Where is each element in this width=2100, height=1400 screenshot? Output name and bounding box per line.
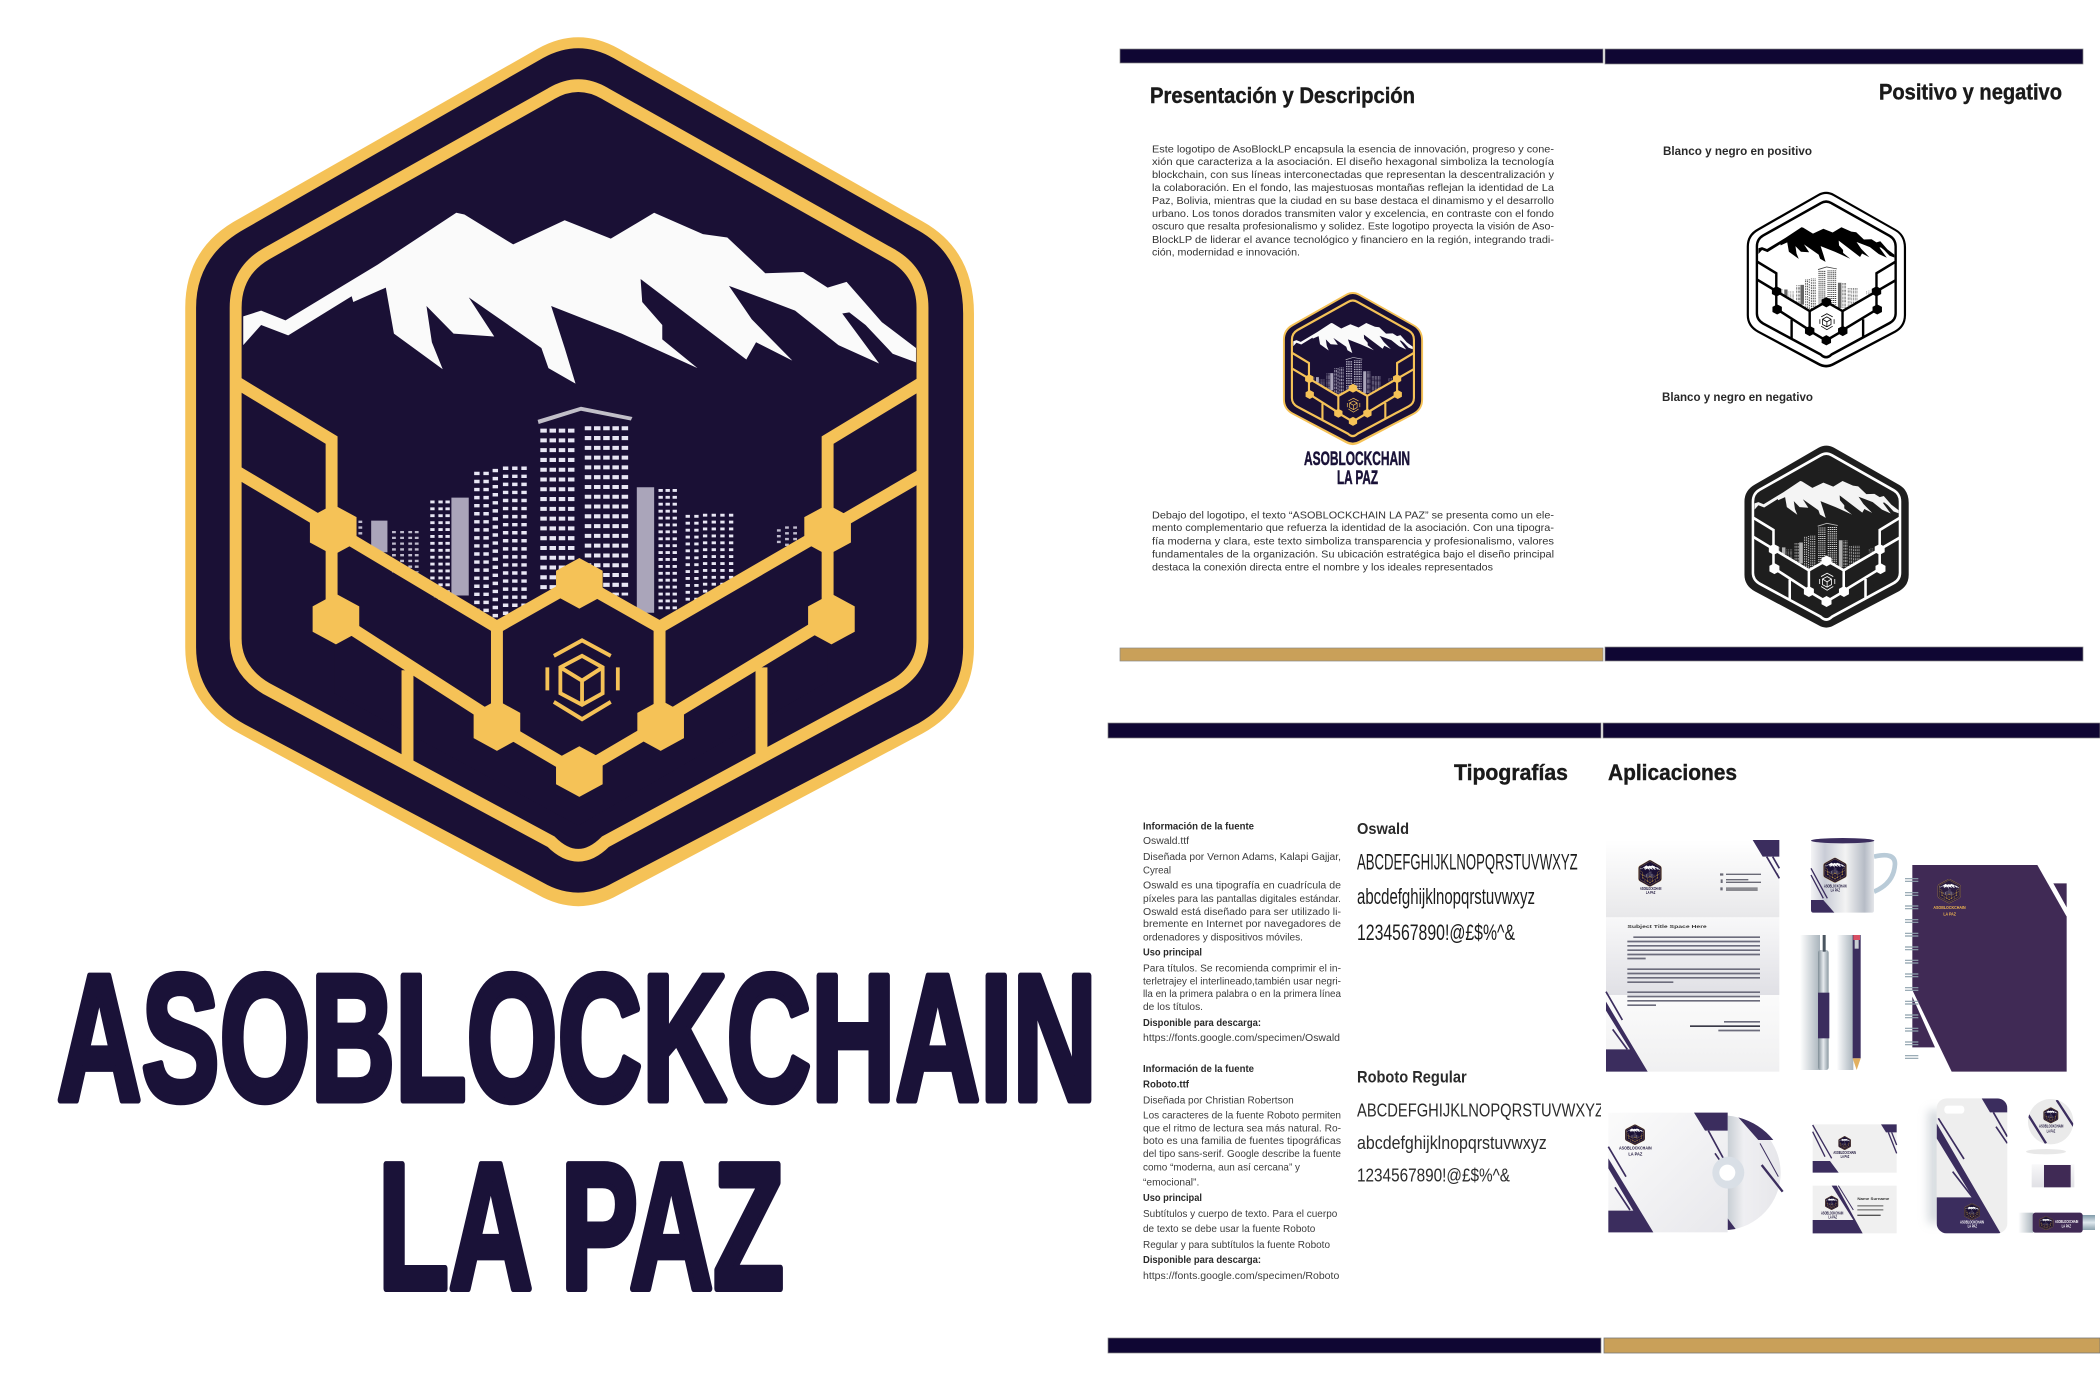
text block: Oswald info: Diseñada por Vernon Adams, Kalapi Gajjar, [1143,852,1341,863]
panel: presentación y descripción [1120,49,1603,661]
specimen: Oswald: abcdefghijklnopqrstuvwxyz [1357,884,1535,909]
logo: black and white positive [1747,192,1906,368]
label: positive: Blanco y negro en positivo [1663,144,1812,158]
text block: Oswald info: Disponible para descarga: [1143,1018,1261,1029]
mockup: round badge: ASOBLOCKCHAIN [2039,1124,2063,1129]
brand wordmark [57,938,1097,1328]
text block: wordmark explanation: fía moderna y clara, este texto simboliza transparencia y profesionalismo, valores [1152,536,1554,548]
specimen: Oswald: 1234567890!@£$%^& [1357,920,1515,945]
specimen: Oswald: ABCDEFGHIJKLNOPQRSTUVWXYZ [1357,850,1578,874]
text block: Roboto info: Subtítulos y cuerpo de texto. Para el cuerpo [1143,1209,1338,1220]
mockup: eraser [2032,1164,2074,1187]
bottom gold bar [1120,648,1603,661]
text block: Roboto info: Regular y para subtítulos la fuente Roboto [1143,1240,1330,1251]
mockup: pen [1800,935,1829,1070]
mockup: round badge [2026,1099,2074,1154]
specimen: Roboto [1357,1069,1604,1186]
mockup: CD and sleeve: LA PAZ [1628,1151,1643,1156]
text block: Oswald info: píxeles para las pantallas digitales estándar. [1143,894,1341,905]
text block: description [1152,144,1555,258]
mockup: phone case: ASOBLOCKCHAIN [1960,1220,1984,1225]
text block: Roboto info: Disponible para descarga: [1143,1255,1261,1266]
text block: description: xión que caracteriza a la asociación. El diseño hexagonal simboliza la tecnología [1152,156,1554,168]
main logo: hexagon badge [185,37,974,906]
text block: description: urbano. Los tonos dorados transmiten valor y excelencia, en contraste con el fondo [1152,208,1554,220]
text block: wordmark explanation: mento complementario que refuerza la identidad de la asociación. Con una tipogra- [1152,522,1555,534]
heading: Presentación y Descripción [1150,83,1415,108]
mockup: business card front [1813,1124,1897,1173]
top bar [1603,723,2100,738]
mockup: letterhead: ASOBLOCKCHAIN [1640,886,1661,891]
mockup: letterhead [1606,840,1779,1072]
text block: Oswald info: terletrajey el interlineado,también usar negri- [1143,976,1341,988]
text block: description: blockchain, con sus líneas interconectadas que representan la descentralización y [1152,169,1555,181]
mockup: CD and sleeve [1608,1113,1783,1232]
mockup: USB drive: ASOBLOCKCHAIN [2055,1219,2078,1224]
mockup: business card back [1813,1186,1897,1233]
text block: Oswald info: Información de la fuente [1143,822,1254,832]
specimen: Roboto: ABCDEFGHIJKLNOPQRSTUVWXYZ [1357,1101,1604,1121]
heading: Tipografías [1454,760,1568,785]
text block: description: ción, modernidad e innovación. [1152,246,1300,258]
text block: Oswald info: https://fonts.google.com/specimen/Oswald [1143,1033,1340,1044]
bottom bar [1108,1338,1601,1353]
mockup: business card back: LA PAZ [1828,1214,1837,1219]
text block: wordmark explanation: destaca la conexión directa entre el nombre y los ideales representados [1152,562,1493,574]
text block: Roboto info: de texto se debe usar la fuente Roboto [1143,1224,1316,1235]
bottom bar [1605,647,2083,661]
text block: Oswald info: Oswald.ttf [1143,836,1189,847]
mockup: USB drive: LA PAZ [2062,1223,2071,1228]
heading: Positivo y negativo [1879,80,2062,104]
mockup: mug [1811,838,1895,913]
specimen: Roboto: abcdefghijklnopqrstuvwxyz [1357,1133,1547,1153]
mockup: business card back: Name Surname [1857,1197,1890,1201]
mockup: letterhead: Subject Title Space Here [1627,924,1707,930]
small colour logo [1283,292,1423,445]
small wordmark: ASOBLOCKCHAIN [1304,449,1410,470]
mockup: mug: ASOBLOCKCHAIN [1824,884,1847,889]
mockup: notebook: LA PAZ [1943,911,1956,917]
text block: Oswald info [1143,822,1341,1044]
mockup: business card front: LA PAZ [1841,1154,1850,1159]
top bar [1605,49,2083,64]
text block: Oswald info: Oswald es una tipografía en cuadrícula de [1143,880,1341,892]
text block: Oswald info: Uso principal [1143,948,1202,958]
text block: description: Este logotipo de AsoBlockLP encapsula la esencia de innovación, progreso y cone- [1152,144,1555,156]
lower mockups [1608,1098,2095,1233]
specimen: Oswald [1357,821,1578,945]
text block: Oswald info: lla en la primera palabra o en la primera línea [1143,989,1341,1000]
text block: wordmark explanation: fundamentales de la organización. Su ubicación estratégica bajo el diseño principal [1152,548,1554,560]
text block: Oswald info: de los títulos. [1143,1002,1203,1013]
top bar [1108,723,1601,738]
mockup: business card front: ASOBLOCKCHAIN [1833,1150,1856,1155]
mockup: notebook: ASOBLOCKCHAIN [1933,905,1966,911]
mockup: phone case [1928,1098,2007,1233]
text block: Roboto info: que el ritmo de lectura sea más natural. Ro- [1143,1124,1341,1134]
wordmark line: ASOBLOCKCHAIN: ASOBLOCKCHAIN [57,938,1097,1139]
text block: Roboto info: del tipo sans-serif. Google describe la fuente [1143,1149,1341,1160]
panel: tipografías [1108,723,1604,1353]
text block: Roboto info: boto es una familia de fuentes tipográficas [1143,1136,1341,1147]
panel: aplicaciones [1603,723,2100,1353]
mockup: USB drive [2018,1213,2095,1233]
mockup: round badge: LA PAZ [2047,1128,2056,1133]
text block: Roboto info: Roboto.ttf [1143,1080,1190,1090]
text block: Roboto info: Información de la fuente [1143,1064,1254,1075]
logo: black and white negative [1742,443,1911,631]
upper mockups [1606,838,2067,1072]
wordmark line: LA PAZ: LA PAZ [378,1126,784,1328]
heading: Aplicaciones [1608,760,1737,785]
text block: wordmark explanation [1152,510,1555,574]
specimen: Oswald: Oswald [1357,821,1409,838]
text block: description: BlockLP de liderar el avance tecnológico y financiero en la región, integrando tradi- [1152,234,1555,246]
small wordmark: LA PAZ [1337,468,1378,489]
text block: Roboto info: Diseñada por Christian Robertson [1143,1096,1294,1106]
mockup: business card back: ASOBLOCKCHAIN [1821,1210,1843,1215]
mockup: CD and sleeve: ASOBLOCKCHAIN [1619,1145,1652,1150]
text block: Roboto info: “emocional”. [1143,1178,1199,1188]
text block: description: la colaboración. En el fondo, las majestuosas montañas reflejan la identidad de La [1152,182,1554,194]
mockup: mug: LA PAZ [1831,888,1840,893]
panel: positivo y negativo [1605,49,2083,661]
text block: Oswald info: ordenadores y dispositivos móviles. [1143,932,1303,944]
mockup: notebook [1905,865,2067,1072]
small wordmark [1304,449,1410,489]
mockup: phone case: LA PAZ [1968,1224,1977,1229]
text block: Oswald info: bremente en Internet por navegadores de [1143,919,1341,930]
label: negative: Blanco y negro en negativo [1662,390,1813,404]
text block: description: Paz, Bolivia, mientras que la ciudad en su base destaca el dinamismo y el desarrollo [1152,195,1554,207]
text block: Oswald info: Para títulos. Se recomienda comprimir el in- [1143,964,1341,974]
text block: Roboto info: Uso principal [1143,1193,1202,1204]
specimen: Roboto: Roboto Regular [1357,1069,1467,1087]
bottom gold bar [1604,1338,2100,1353]
text block: description: oscuro que resalta profesionalismo y solidez. Este logotipo proyecta la visión de Aso- [1152,220,1555,232]
mockup: pencil [1837,935,1861,1070]
top bar [1120,49,1603,63]
text block: wordmark explanation: Debajo del logotipo, el texto “ASOBLOCKCHAIN LA PAZ” se presenta como un ele- [1152,510,1555,522]
text block: Oswald info: Cyreal [1143,866,1171,876]
text block: Roboto info: como “moderna, aun así cercana” y [1143,1162,1300,1174]
text block: Oswald info: Oswald está diseñado para ser utilizado li- [1143,907,1341,918]
text block: Roboto info: https://fonts.google.com/specimen/Roboto [1143,1271,1340,1282]
mockup: letterhead: LA PAZ [1646,890,1656,895]
specimen: Roboto: 1234567890!@£$%^& [1357,1166,1510,1186]
text block: Roboto info [1143,1064,1341,1282]
text block: Roboto info: Los caracteres de la fuente Roboto permiten [1143,1110,1341,1122]
